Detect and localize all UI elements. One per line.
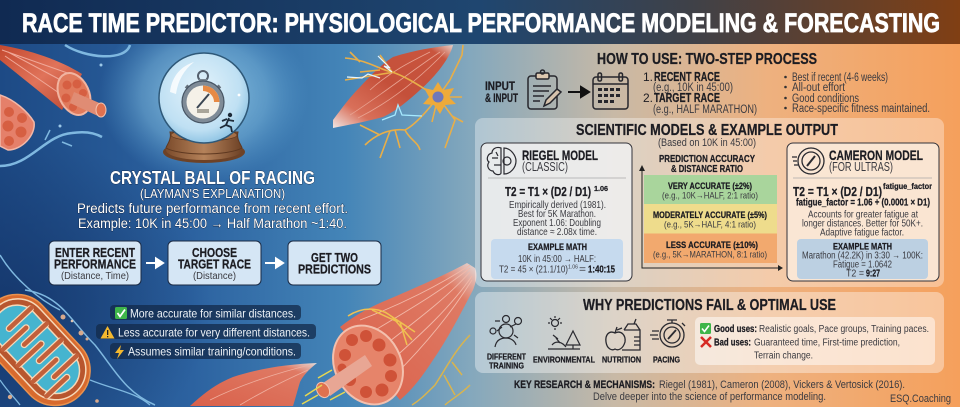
flow box: choose target race: (Distance)	[193, 271, 236, 282]
flow box: enter recent performance	[49, 241, 141, 285]
text block: steps: (e.g., HALF MARATHON)	[653, 104, 757, 116]
icon: nutrition	[606, 319, 640, 350]
label: different training: TRAINING	[489, 360, 524, 370]
icon: green check	[115, 307, 127, 319]
callout: notes on accuracy: Less accurate for very different distances.	[118, 326, 310, 340]
example math: riegel: 10K in 45:00 → HALF:	[518, 254, 596, 265]
text block: steps: (e.g., 10K in 45:00)	[653, 82, 733, 94]
chart title: & DISTANCE RATIO	[671, 164, 743, 175]
text block: cameron description: Adaptive fatigue factor.	[820, 228, 904, 238]
text block: riegel description	[509, 199, 606, 238]
heading: cameron model	[829, 147, 923, 174]
arrow	[265, 258, 283, 268]
icon: warning triangle	[100, 326, 114, 338]
example math: cameron: Marathon (42.2K) in 3:30 → 100K:	[802, 250, 923, 262]
text block: explanation: Example: 10K in 45:00 → Half Marathon ~1:40.	[78, 216, 347, 231]
label: different training: DIFFERENT	[487, 352, 527, 362]
heading: riegel model: (CLASSIC)	[522, 160, 568, 174]
example math: riegel: T2 = 45 × (21.1/10)	[499, 264, 568, 276]
illustration: crystal ball with stopwatch	[159, 53, 249, 163]
title banner	[0, 0, 960, 44]
text block: steps	[643, 70, 757, 116]
text block: riegel description: Empirically derived (1981).	[509, 199, 606, 211]
callout: good and bad uses: Bad uses:	[714, 338, 751, 348]
footer: key research	[514, 379, 905, 403]
icon: lightning bolt	[115, 345, 124, 359]
flow box: get two predictions: PREDICTIONS	[298, 262, 371, 276]
flow box: get two predictions: GET TWO	[311, 251, 358, 265]
illustration: large muscle cross-section bottom	[190, 263, 476, 407]
arrow	[568, 87, 589, 97]
formula: cameron	[793, 181, 933, 208]
arrow	[146, 258, 163, 268]
example math: cameron: Fatigue = 1.0642	[833, 260, 892, 270]
icon: bad cross	[701, 337, 711, 347]
example math: riegel: EXAMPLE MATH	[528, 242, 587, 253]
icon: calendar	[593, 73, 628, 109]
text block: steps: TARGET RACE	[654, 91, 720, 105]
text block: cameron description	[802, 210, 923, 238]
icon: good check	[700, 323, 711, 334]
callout: notes on accuracy: More accurate for similar distances.	[130, 306, 296, 320]
label: input: & INPUT	[485, 91, 518, 105]
formula: riegel: T2 = T1 × (D2 / D1)	[505, 184, 591, 199]
label: input	[485, 79, 518, 105]
label: pacing: PACING	[653, 354, 680, 364]
text block: steps: RECENT RACE	[654, 70, 720, 84]
band: moderately accurate	[644, 204, 777, 234]
text block: riegel description: distance ≈ 2.08x time.	[517, 226, 597, 238]
label: input: INPUT	[485, 79, 516, 93]
text block: steps: 1.	[643, 70, 653, 84]
label: different training	[487, 352, 527, 370]
heading: scientific models: SCIENTIFIC MODELS & EXAMPLE OUTPUT	[576, 122, 838, 139]
footer: key research: Riegel (1981), Cameron (2008), Vickers & Vertosick (2016).	[659, 379, 905, 391]
text block: explanation: Predicts future performance from recent effort.	[77, 201, 348, 216]
band: less accurate: LESS ACCURATE (±10%)	[666, 240, 758, 251]
heading: why predictions fail: WHY PREDICTIONS FAIL & OPTIMAL USE	[583, 297, 836, 314]
panel: riegel model	[481, 143, 632, 281]
flow box: get two predictions	[288, 241, 381, 285]
flow box: enter recent performance: PERFORMANCE	[54, 258, 136, 272]
label: environmental: ENVIRONMENTAL	[533, 354, 595, 364]
band: very accurate	[644, 175, 777, 204]
footer: key research: KEY RESEARCH & MECHANISMS:	[514, 379, 655, 391]
icon: speed gauge	[792, 148, 824, 174]
callout: good and bad uses: Guaranteed time, First-time prediction,	[754, 338, 900, 348]
text block: conditions	[784, 72, 930, 115]
icon: clipboard	[528, 70, 561, 109]
heading: riegel model: RIEGEL MODEL	[522, 147, 598, 163]
example math: cameron: T2 =	[846, 268, 864, 280]
text block: cameron description: longer distances. Better for 50K+.	[802, 218, 923, 230]
heading: cameron model: (FOR ULTRAS)	[829, 160, 893, 174]
text block: cameron description: Accounts for greater fatigue at	[808, 210, 918, 220]
flow box: choose target race: CHOOSE	[192, 246, 237, 260]
flow box: choose target race: TARGET RACE	[178, 258, 251, 272]
icon: brain and gear	[487, 147, 516, 175]
example math: riegel: 1.06	[568, 264, 578, 270]
example math: riegel: 1:40:15	[588, 264, 615, 276]
text block: explanation	[77, 201, 348, 231]
text block: conditions: All-out effort	[792, 82, 846, 94]
band: very accurate: (e.g., 10K→HALF, 2:1 ratio)	[662, 190, 758, 202]
band: moderately accurate: (e.g., 5K→HALF, 4:1 ratio)	[664, 220, 756, 230]
footer: key research: Delve deeper into the science of performance modeling.	[593, 391, 826, 403]
heading: crystal ball of racing	[110, 168, 315, 201]
flow box: choose target race	[168, 241, 261, 285]
flow box: enter recent performance: (Distance, Time)	[61, 271, 129, 282]
icon: environmental	[548, 316, 580, 349]
band: moderately accurate: MODERATELY ACCURATE (±5%)	[653, 210, 767, 221]
band: less accurate: (e.g., 5K→MARATHON, 8:1 ratio)	[653, 250, 767, 260]
band: less accurate	[644, 234, 777, 263]
example math: cameron: 9:27	[866, 268, 880, 280]
heading: cameron model: CAMERON MODEL	[829, 147, 923, 163]
formula: cameron: T2 = T1 × (D2 / D1)	[793, 184, 882, 199]
icon: different training	[490, 316, 522, 347]
chart: prediction accuracy and distance ratio	[639, 154, 783, 271]
illustration: mitochondrion	[0, 255, 155, 407]
callout: good and bad uses: Terrain change.	[754, 350, 813, 362]
text block: conditions: Good conditions	[792, 93, 859, 105]
text block: conditions: Best if recent (4-6 weeks)	[792, 72, 888, 84]
panel: scientific models	[475, 118, 944, 287]
chart title	[659, 154, 755, 175]
text block: riegel description: Best for 5K Marathon.	[518, 208, 596, 220]
illustration: muscle with neuron top right	[333, 45, 463, 158]
example math: riegel	[491, 239, 623, 279]
formula: cameron: fatigue_factor	[883, 181, 933, 191]
example math: cameron: EXAMPLE MATH	[833, 242, 892, 252]
formula: riegel: 1.06	[594, 184, 608, 193]
flow box: enter recent performance: ENTER RECENT	[55, 246, 135, 260]
heading: how to use: HOW TO USE: TWO-STEP PROCESS	[597, 51, 817, 68]
icon: pacing	[650, 320, 685, 347]
panel: cameron model	[787, 143, 939, 281]
heading: riegel model	[522, 147, 598, 174]
text block: riegel description: Exponent 1.06: Doubling	[513, 217, 601, 229]
example math: cameron	[797, 239, 928, 280]
panel: why predictions fail	[475, 292, 944, 373]
heading: crystal ball of racing: (LAYMAN'S EXPLANATION)	[140, 187, 285, 201]
chart axes arrows	[639, 165, 783, 271]
section: how to use	[485, 51, 930, 116]
callout: good and bad uses: Realistic goals, Pace groups, Training paces.	[759, 324, 929, 335]
label: nutrition: NUTRITION	[602, 354, 641, 364]
callout: good and bad uses	[695, 317, 935, 365]
callout: notes on accuracy: Assumes similar training/conditions.	[128, 344, 296, 358]
callout: notes on accuracy	[96, 305, 316, 359]
text block: conditions: Race-specific fitness maintained.	[792, 103, 930, 115]
example math: riegel: =	[579, 264, 586, 276]
heading: crystal ball of racing: CRYSTAL BALL OF RACING	[110, 168, 315, 188]
band: very accurate: VERY ACCURATE (±2%)	[668, 181, 752, 192]
text block: steps: 2.	[643, 91, 653, 105]
callout: good and bad uses: Good uses:	[714, 324, 757, 335]
subheading: based on: (Based on 10K in 45:00)	[658, 137, 756, 149]
illustration: muscle bundles top left	[0, 45, 130, 166]
chart title: PREDICTION ACCURACY	[659, 154, 755, 165]
